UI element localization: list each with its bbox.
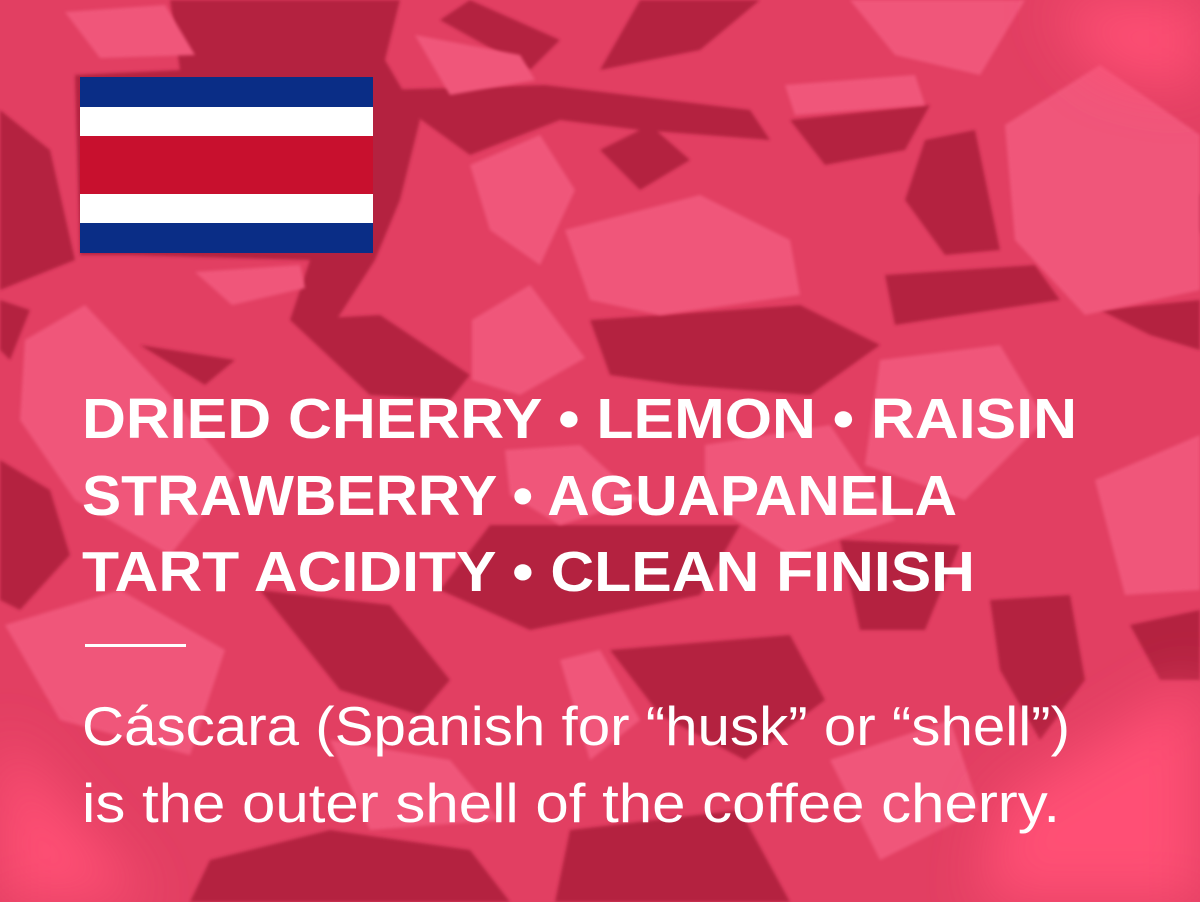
divider rule — [85, 644, 186, 647]
heading: flavour notes: DRIED CHERRY • LEMON • RAISIN — [82, 387, 1077, 451]
heading: flavour notes: TART ACIDITY • CLEAN FINISH — [82, 540, 975, 604]
heading: flavour notes: STRAWBERRY • AGUAPANELA — [82, 464, 957, 528]
heading: flavour notes — [82, 387, 1077, 604]
description text — [82, 695, 1070, 834]
flag: Costa Rica — [80, 77, 373, 253]
description text: Cáscara (Spanish for “husk” or “shell”) — [82, 695, 1070, 757]
description text: is the outer shell of the coffee cherry. — [82, 772, 1060, 834]
